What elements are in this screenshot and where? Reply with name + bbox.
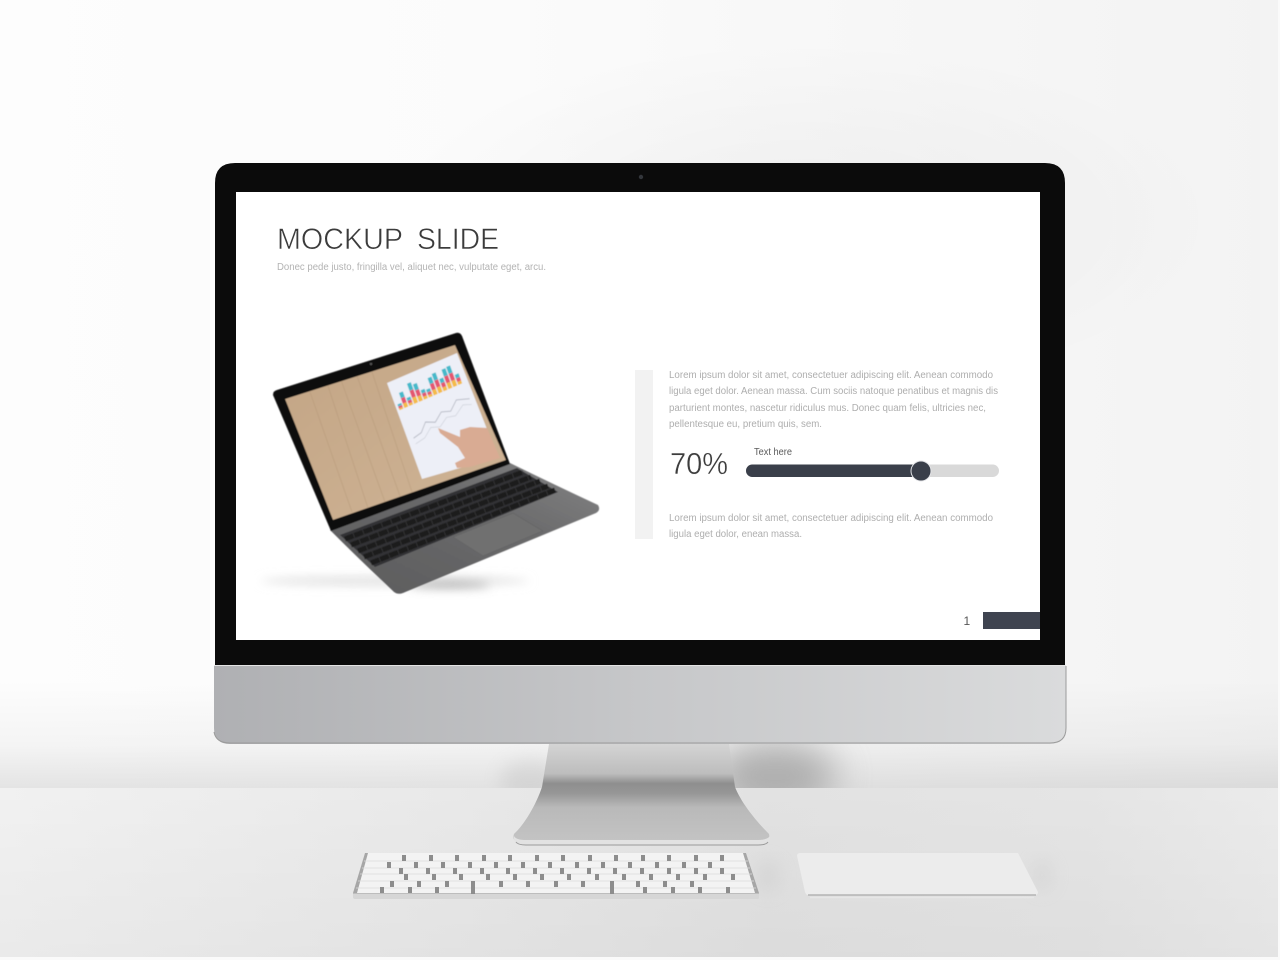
subtitle: Donec pede justo, fringilla vel, aliquet nec, vulputate eget, arcu. [277, 262, 546, 273]
panel: slide screen [236, 192, 1040, 640]
laptop lid [273, 333, 510, 531]
hand [438, 427, 500, 468]
bar chart on paper [392, 363, 462, 410]
paper with charts [387, 353, 498, 479]
page number: 1 [964, 614, 970, 628]
lower paragraph: ligula eget dolor, enean massa. [669, 529, 802, 540]
camera [639, 175, 643, 179]
laptop base [330, 463, 599, 594]
line chart on paper [413, 398, 472, 444]
lower paragraph: Lorem ipsum dolor sit amet, consectetuer adipiscing elit. Aenean commodo [669, 513, 993, 524]
keyboard key gaps [380, 855, 735, 894]
monitor stand [513, 744, 770, 845]
laptop illustration [260, 333, 599, 594]
body paragraph: Lorem ipsum dolor sit amet, consectetuer adipiscing elit. Aenean commodo [669, 370, 993, 381]
monitor [214, 163, 1066, 744]
laptop camera [370, 363, 372, 365]
bezel [215, 163, 1065, 665]
body paragraph [669, 370, 998, 430]
laptop screen photo [285, 345, 506, 520]
laptop shadow [260, 577, 530, 588]
laptop trackpad [453, 513, 543, 556]
body paragraph: parturient montes, nascetur ridiculus mus. Donec quam felis, ultricies nec, [669, 403, 986, 414]
trackpad [797, 853, 1052, 898]
body paragraph: ligula eget dolor. Aenean massa. Cum sociis natoque penatibus et magnis dis [669, 386, 998, 397]
left accent bar [635, 370, 653, 539]
keyboard [353, 853, 780, 899]
title: MOCKUP [277, 223, 403, 256]
title [277, 223, 499, 256]
progress slider [746, 461, 999, 481]
title: SLIDE [417, 223, 499, 256]
chin [214, 665, 1066, 744]
slider label: Text here [754, 447, 792, 458]
percentage value: 70% [670, 446, 728, 481]
laptop keyboard [340, 468, 558, 567]
body paragraph: pellentesque eu, pretium quis, sem. [669, 419, 822, 430]
lower paragraph [669, 513, 993, 540]
page tab [983, 612, 1040, 629]
keyboard row lines [356, 861, 756, 888]
